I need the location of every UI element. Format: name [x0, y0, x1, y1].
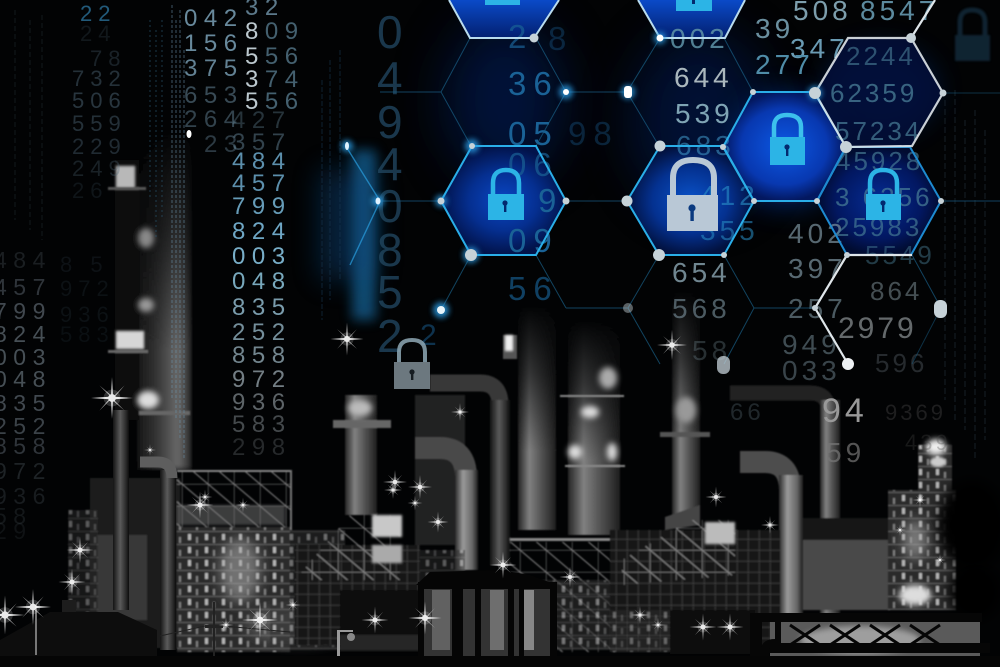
digit rain: second left column: 24: [80, 21, 116, 46]
digit rain: second left column: 506: [72, 88, 127, 113]
digit rain: second left column: 229: [72, 134, 127, 159]
digit rain: centre left columns: 374: [245, 66, 305, 93]
digit rain: centre blue columns: 98: [568, 115, 619, 152]
digit rain: centre right columns: 412: [700, 180, 759, 211]
digit rain: centre right columns: 94: [822, 392, 868, 430]
digit rain: right columns: 25983: [835, 212, 922, 242]
digit rain: centre right columns: 539: [675, 98, 734, 129]
digit rain: second left column: 732: [72, 66, 127, 91]
digit rain: centre right columns: 002: [670, 23, 729, 54]
tree silhouette: [938, 480, 1000, 620]
digit rain: centre left columns: 23: [204, 131, 244, 158]
digit rain: right columns: 439: [905, 430, 951, 455]
digit rain: centre right columns: 402: [788, 218, 847, 249]
digit rain: centre right columns: 59: [826, 437, 865, 468]
digit rain: centre left columns: 375: [184, 55, 244, 82]
digit rain: centre left columns: 809: [245, 18, 305, 45]
digit rain: centre right columns: 033: [782, 355, 841, 386]
digit rain: large faint column: 5: [377, 266, 403, 318]
digit rain: second left column: 26: [72, 178, 108, 203]
digit rain: centre left columns: 357: [232, 129, 292, 156]
digit rain: large faint column: 4: [377, 138, 403, 190]
digit rain: large faint column: 0: [377, 180, 403, 232]
icon: padlock cropped top centre: [676, 0, 712, 11]
network: white hexagon outlines: [815, 0, 943, 364]
digit rain: right columns: 57234: [835, 116, 922, 146]
refinery: left tower: [108, 130, 192, 470]
digit rain: right columns: 62359: [830, 78, 917, 108]
digit rain: large faint column: 2: [377, 310, 403, 362]
digit rain: centre left columns: 556: [245, 43, 305, 70]
icon: padlock cropped top left: [485, 0, 520, 5]
digit rain: centre right columns: 39: [755, 13, 794, 44]
digit rain: centre left columns: 653: [184, 82, 244, 109]
digit rain: right columns: 3 6256: [835, 182, 933, 212]
digit rain: centre right columns: 277: [755, 49, 814, 80]
icon: padlock upper hexagon: [770, 115, 805, 165]
digit rain: centre left columns: 556: [245, 88, 305, 115]
digit rain: centre right columns: 568: [672, 293, 731, 324]
foreground: bottom left building: [0, 600, 157, 657]
icon: faint padlock top right: [955, 10, 990, 61]
digit rain: large faint column: 8: [377, 224, 403, 276]
digit rain: second left column: [60, 1, 127, 347]
digit rain: centre left columns: 583: [232, 411, 292, 438]
network: blue hexagon outlines: [441, 92, 941, 255]
digit rain: right columns: 5549: [865, 240, 935, 270]
refinery: left plant structure: [68, 470, 355, 652]
digit rain: second left column: 972: [60, 276, 115, 301]
digit rain: centre right columns: 257: [788, 293, 847, 324]
digit rain: centre left columns: 799: [232, 193, 292, 220]
digit rain: second left column: 559: [72, 111, 127, 136]
digit rain: centre blue columns: [420, 18, 619, 352]
digit rain: centre right columns: 347: [790, 33, 849, 64]
digit rain: centre blue columns: 09: [508, 222, 559, 259]
refinery: central plant: [295, 305, 645, 652]
digit rain: centre left columns: 042: [184, 5, 244, 32]
digit rain: right columns: 45928: [836, 146, 923, 176]
digit rain: centre left columns: 427: [232, 107, 292, 134]
blue glows behind hexagons: [320, 20, 935, 320]
digit rain: second left column: 583: [60, 322, 115, 347]
digit rain: right columns: 9369: [885, 400, 946, 425]
digit rain: centre right columns: [670, 0, 938, 468]
digit rain: right columns: 864: [870, 276, 922, 306]
digit rain: centre left columns: 824: [232, 218, 292, 245]
icon: padlock right hexagon: [866, 170, 901, 220]
digit rain: second left column: 8 5: [60, 252, 109, 277]
digit rain: centre left columns: 835: [232, 294, 292, 321]
digit rain: right columns: 2244: [846, 41, 916, 71]
digit rain: centre right columns: 683: [676, 130, 735, 161]
icon: padlock hexagon 1: [488, 170, 524, 220]
digit rain: centre blue columns: 05: [508, 115, 559, 152]
digit rain: centre blue columns: 2: [508, 18, 533, 55]
digit rain: second left column: 249: [72, 156, 127, 181]
digit rain: centre right columns: 949: [782, 329, 841, 360]
digit rain: second left column: 936: [60, 302, 115, 327]
network: top partial hexagons: [449, 0, 745, 38]
foreground: dark frame building: [416, 570, 557, 660]
utility pole and camera mast: [160, 602, 355, 667]
digit rain: centre left columns: 484: [232, 148, 292, 175]
refinery: right plant: [610, 290, 890, 654]
digit rain: right columns: [830, 41, 951, 455]
digit rain: centre blue columns: 8: [548, 20, 573, 57]
digit rain: centre left columns: 048: [232, 268, 292, 295]
vertical streak noise over left tower: [15, 5, 985, 460]
digit rain: centre right columns: 58: [692, 335, 731, 366]
digit rain: far left column: [0, 247, 52, 544]
digit rain: centre left columns: 936: [232, 389, 292, 416]
icon: grey padlock over plant: [394, 340, 430, 389]
digit rain: second left column: 78: [90, 46, 126, 71]
refinery: far right tower: [888, 439, 956, 610]
digit rain: centre left columns: 858: [232, 342, 292, 369]
digit rain: right columns: 2979: [838, 312, 917, 345]
icon: large grey padlock: [667, 160, 718, 231]
foreground: bridge truss: [750, 613, 990, 667]
network: node dots: [186, 32, 947, 374]
digit rain: centre blue columns: 9: [538, 182, 563, 219]
digit rain: right columns: 596: [875, 348, 927, 378]
digit rain: centre left columns: 003: [232, 243, 292, 270]
digit rain: centre left columns: 972: [232, 366, 292, 393]
digit rain: large faint column: [377, 6, 403, 362]
digit rain: centre blue columns: 2: [420, 319, 444, 352]
digit rain: centre left columns: 252: [232, 319, 292, 346]
digit rain: centre right columns: 397: [788, 253, 847, 284]
digit rain: centre right columns: 355: [700, 215, 759, 246]
digit rain: centre right columns: 66: [730, 399, 765, 426]
star flare lights: [0, 322, 946, 640]
digit rain: large faint column: 9: [377, 96, 403, 148]
refinery: left pipes: [113, 410, 176, 650]
hexagon fills: [441, 0, 943, 255]
digit rain: centre blue columns: 36: [508, 65, 559, 102]
digit rain: centre left columns: [184, 0, 305, 461]
digit rain: large faint column: 4: [377, 52, 403, 104]
digit rain: centre left columns: 298: [232, 434, 292, 461]
digit rain: centre right columns: 644: [674, 62, 733, 93]
digit rain: centre left columns: 264: [184, 106, 244, 133]
digit rain: second left column: 22: [80, 1, 116, 26]
ground band: [0, 656, 1000, 667]
digit rain: centre left columns: 457: [232, 170, 292, 197]
digit rain: centre blue columns: 56: [508, 270, 559, 307]
digit rain: centre blue columns: 06: [508, 146, 559, 183]
digit rain: centre left columns: 156: [184, 30, 244, 57]
network: faint connector lines: [347, 38, 1000, 364]
digit rain: large faint column: 0: [377, 6, 403, 58]
digit rain: centre right columns: 654: [672, 257, 731, 288]
